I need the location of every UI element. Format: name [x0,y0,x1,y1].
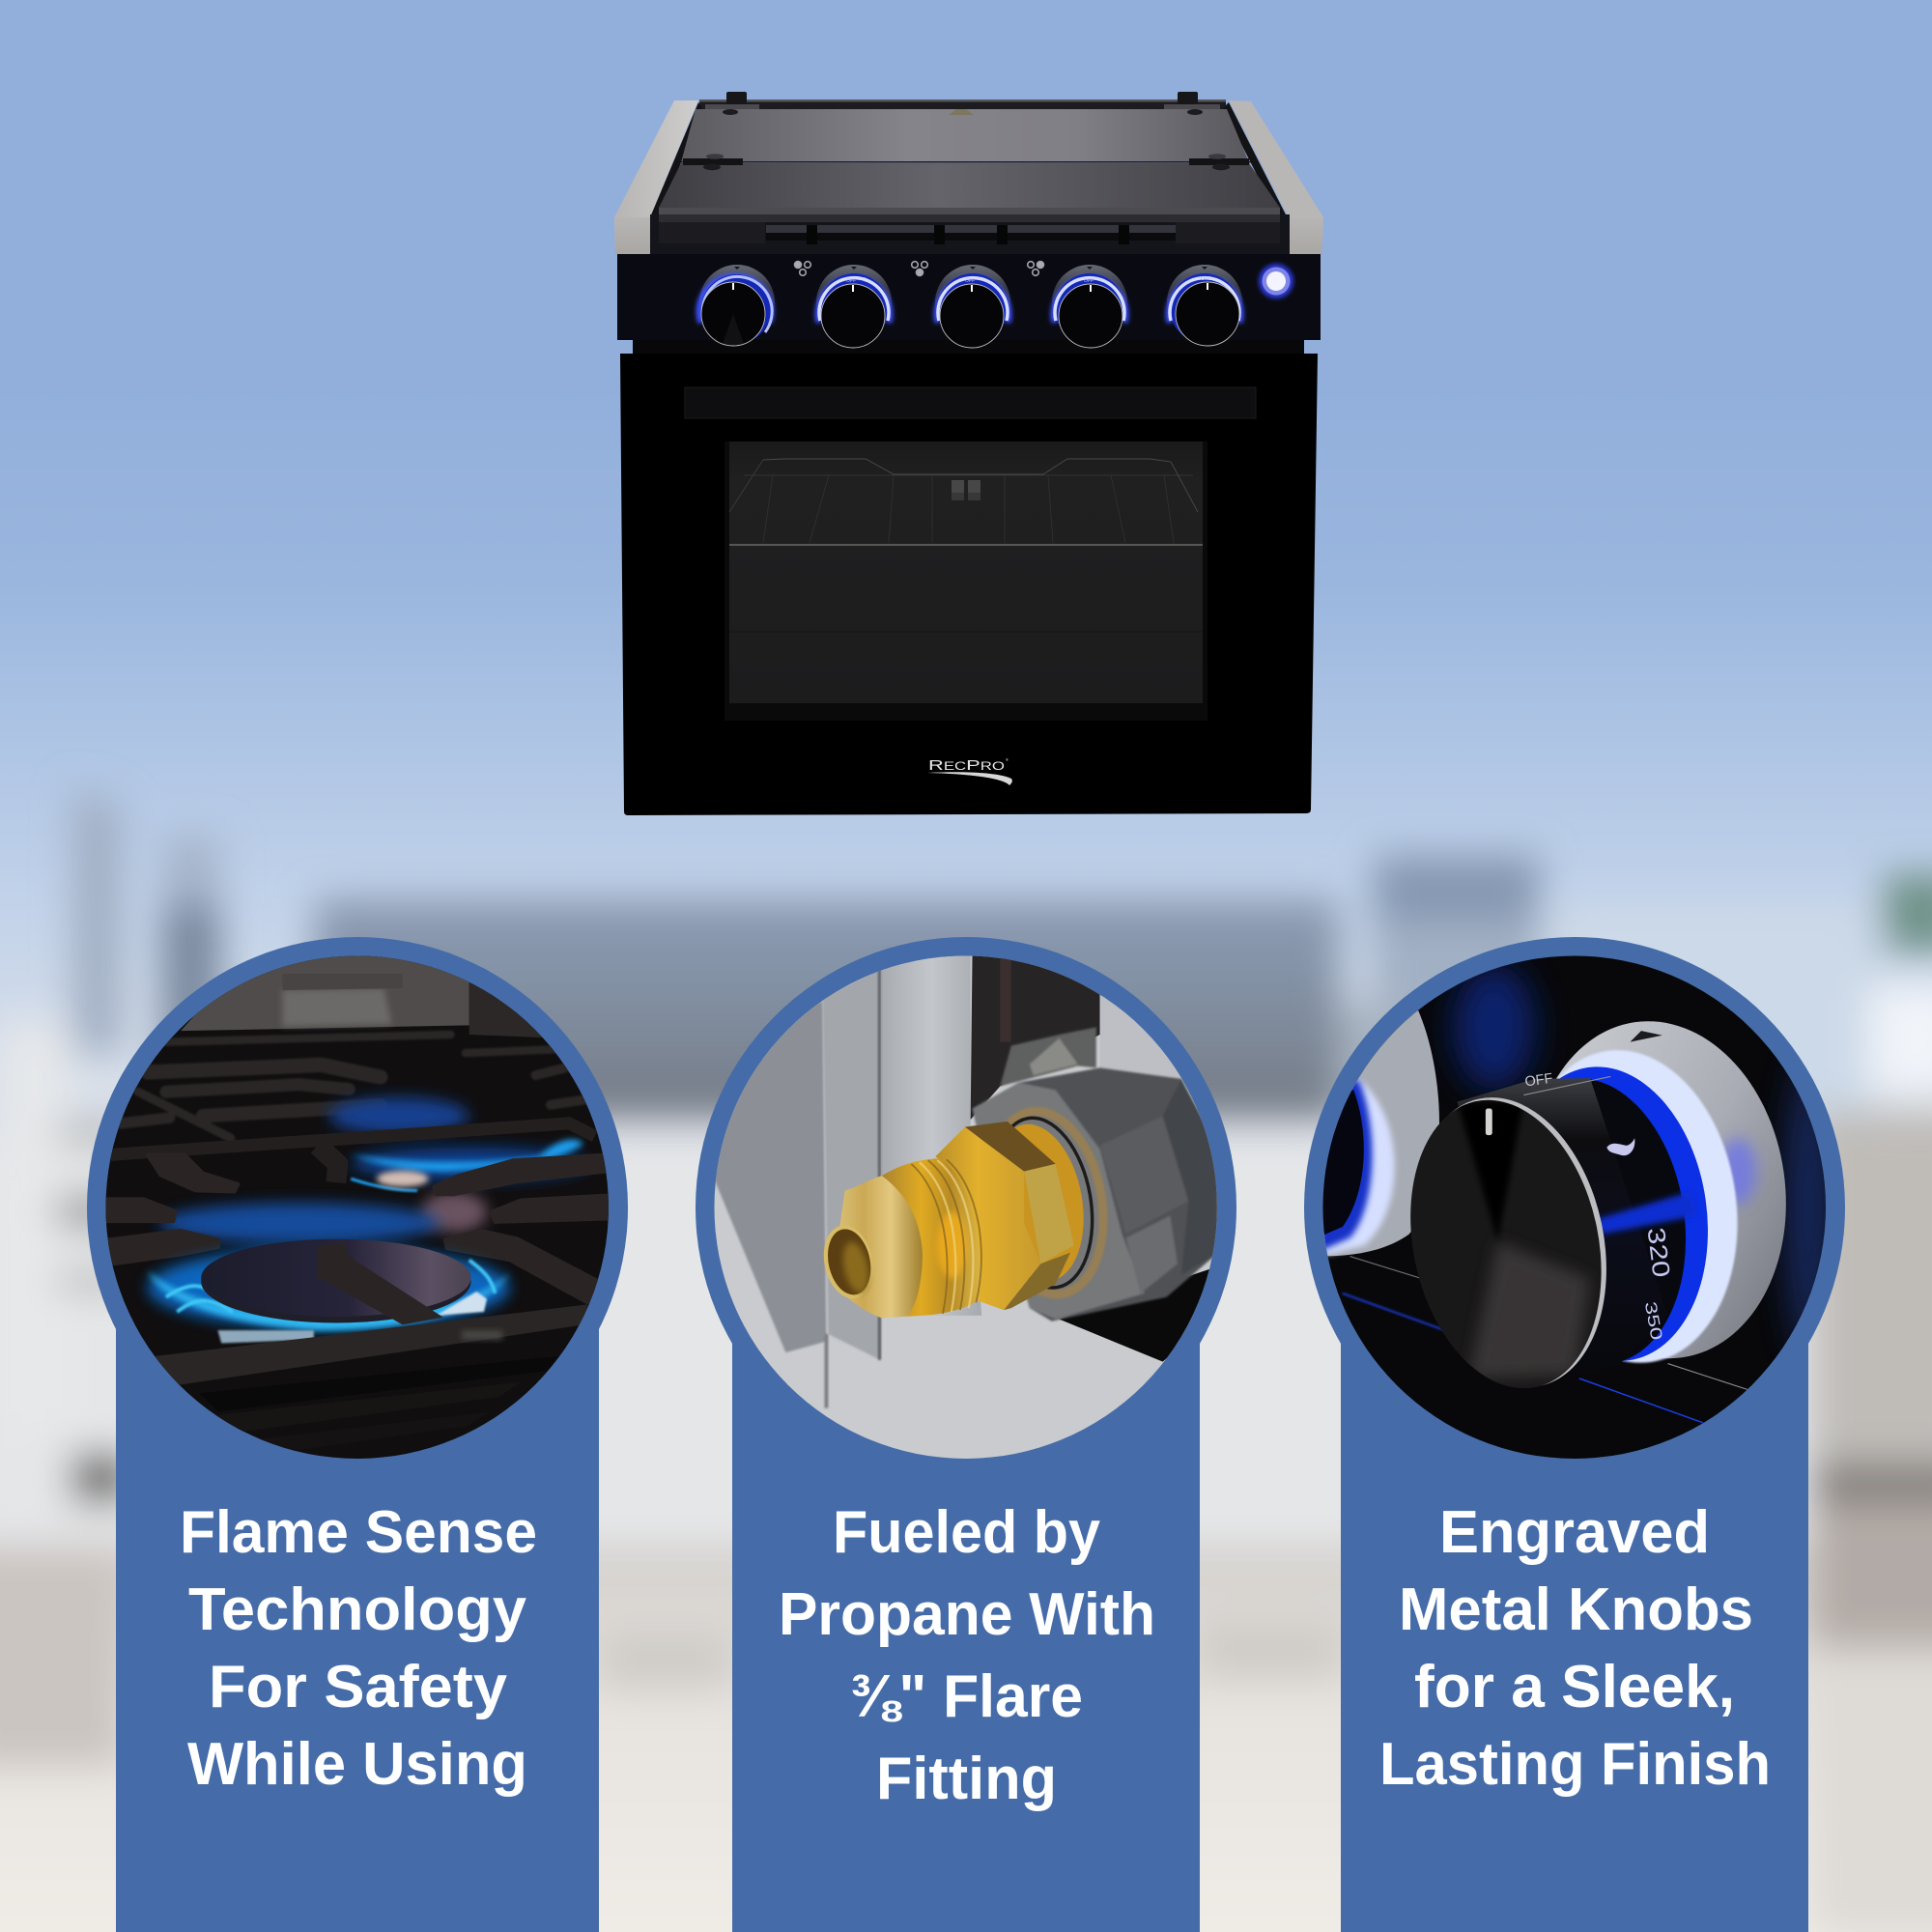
oven window [724,441,1208,721]
photo: brass flare fitting [708,950,1226,1467]
rear grate bar [110,1123,595,1182]
blue backlight haze [1454,964,1831,1356]
oven rack [729,459,1203,545]
engraved flame mark [1606,1138,1634,1155]
stainless side rail: left [614,100,698,254]
column panel [696,937,1236,1932]
photo: illuminated metal knob [1317,950,1834,1467]
caption: flame sense: Flame Sense [180,1499,537,1566]
feature column 1: flame sense technology [87,937,628,1932]
back flame [328,1097,469,1134]
brass hex nut [935,1122,1074,1310]
middle blue haze [158,1203,440,1243]
pointer triangle [1630,1031,1662,1042]
knob 2: OFF [846,278,856,284]
engraved OFF: OFF [1524,1071,1554,1091]
knob barrel [1457,1066,1703,1387]
control panel [617,254,1321,340]
column panel [87,937,628,1932]
feature column 3: engraved metal knobs [1304,937,1845,1932]
front grate arm [318,1243,443,1324]
caption: flame sense: For Safety [209,1654,508,1720]
knob face [1385,1079,1632,1406]
feature column 2: propane flare fitting [696,937,1236,1932]
photo: gas burner flames [99,950,617,1467]
knob 1 [699,265,775,346]
lid details [659,109,1280,214]
neighbouring knob [1317,1002,1439,1257]
flared nose cone [832,1176,923,1319]
panel lines [1343,1257,1747,1423]
under-panel shadow [633,338,1304,355]
caption: metal knobs: Engraved [1439,1499,1710,1566]
RecPro logo: R EC P RO [928,757,1005,774]
silver backplate [1510,1005,1807,1376]
stainless side rail: right [1229,100,1323,254]
glass lid: rear panel [681,109,1249,162]
glowing ring [1492,1036,1757,1377]
fitting bore [823,1226,873,1298]
knob 2 [816,265,892,348]
caption: flame sense [180,1499,537,1798]
power indicator light [1259,264,1293,298]
caption: metal knobs: for a Sleek, [1414,1654,1735,1720]
caption: propane fitting: Propane With [779,1581,1155,1648]
cast iron valve body [973,1027,1218,1321]
main burner flame ring [148,1239,510,1344]
cooktop front lip [650,214,1290,254]
column panel [1304,937,1845,1932]
caption: metal knobs: Lasting Finish [1379,1731,1771,1798]
stainless rail fronts [614,102,1323,254]
door handle recess [685,387,1256,418]
grate tines [107,1154,608,1302]
engraved 350: 350 [1641,1300,1666,1342]
rust seal ring [993,1106,1109,1300]
caption: propane fitting: Fueled by [833,1499,1100,1566]
caption: propane fitting: Fitting [876,1746,1057,1812]
knob 5 [1167,265,1242,346]
caption: metal knobs: Metal Knobs [1399,1577,1753,1643]
glass lid: front panel [659,163,1280,208]
caption: metal knobs [1379,1499,1771,1798]
caption: propane fitting [779,1499,1155,1812]
back bar and hinges [699,92,1226,110]
caption: flame sense: While Using [187,1731,527,1798]
caption: flame sense: Technology [188,1577,527,1643]
burner indicator dots [794,261,1043,276]
product: RecPro RV stove and oven [614,92,1323,815]
knob 5: OFF [1201,276,1210,282]
knob 4 [1052,265,1127,348]
engraved 320: 320 [1642,1226,1675,1279]
knob 4: OFF [1084,278,1094,284]
rear grate, out of focus [122,1035,587,1138]
RecPro logo [927,757,1012,785]
RecPro logo: ® [1006,757,1009,762]
oven door [620,354,1318,815]
caption: propane fitting: ⅜" Flare [850,1663,1083,1730]
threaded section [882,1158,981,1317]
knob 3 [935,265,1010,348]
right flame [351,1140,587,1233]
knob 3: OFF [965,278,975,284]
front grate bar [155,1304,587,1452]
